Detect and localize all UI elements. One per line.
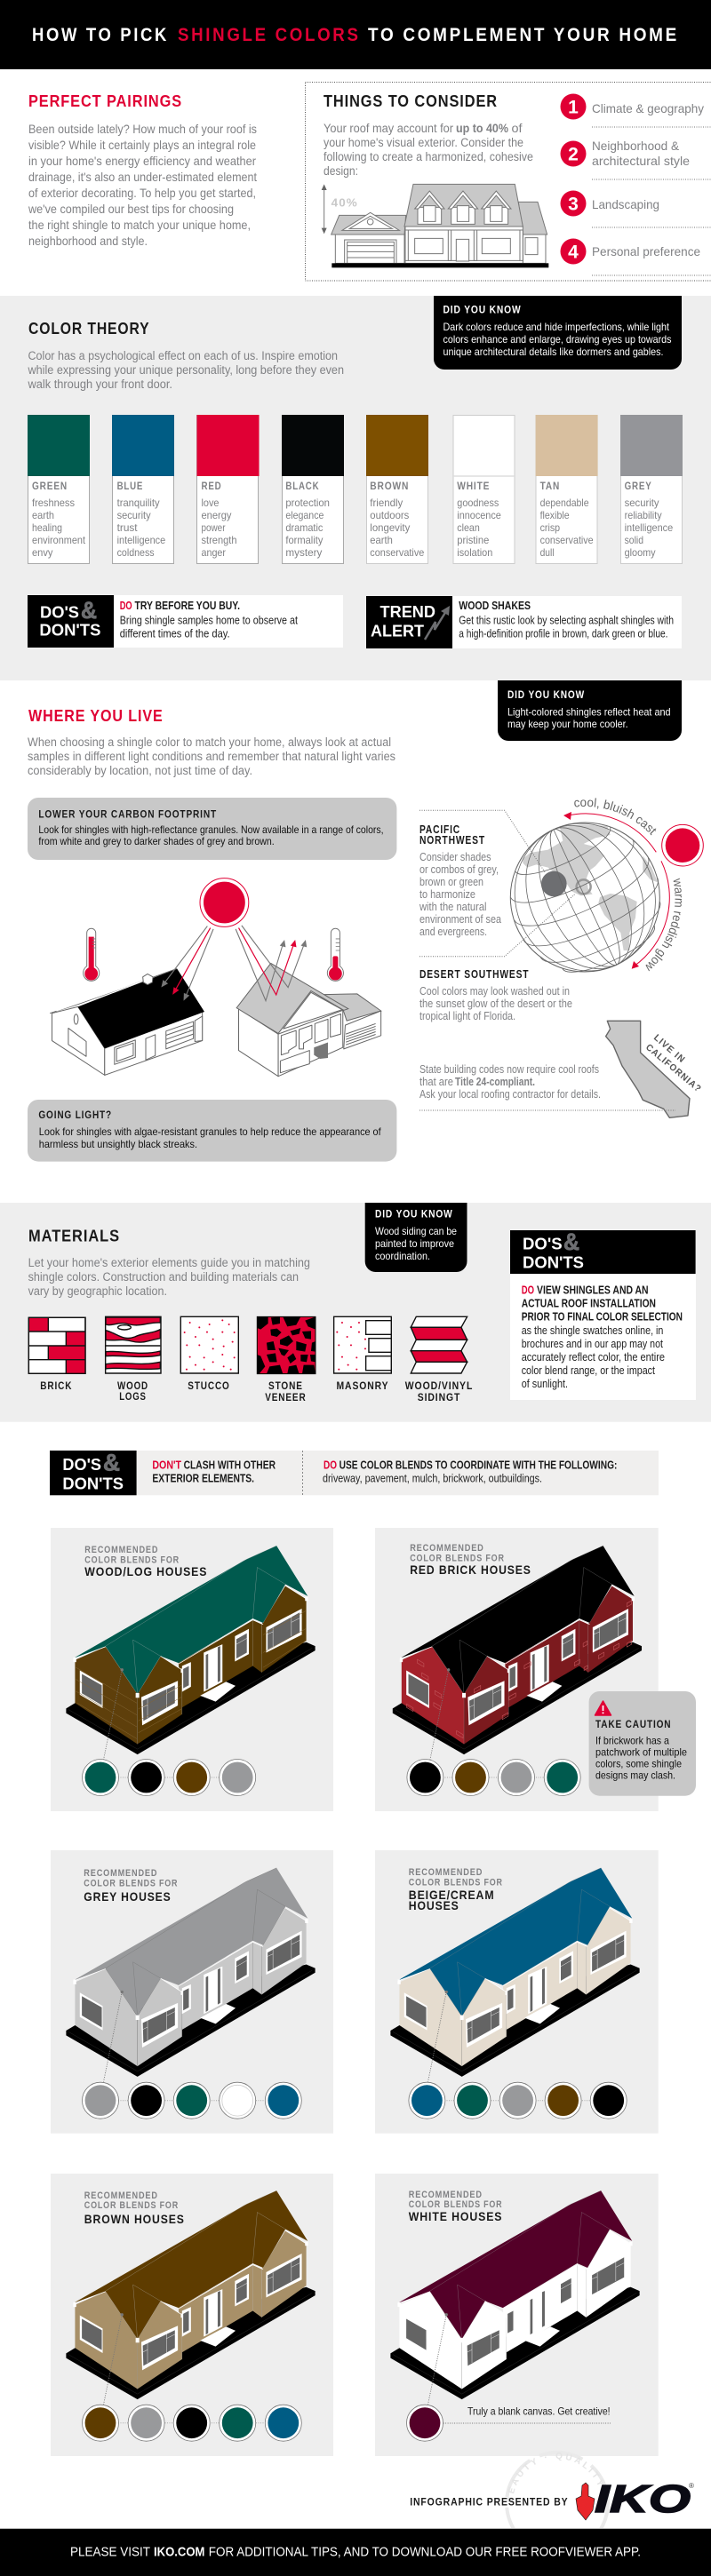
panel: do's and don'ts view shingles: as the shingle swatches online, in <box>522 1324 663 1337</box>
icon: house with 40 percent roof <box>322 184 548 267</box>
swatch card: black: mystery <box>285 546 322 559</box>
list: consideration 3 landscaping: 3 <box>568 194 579 215</box>
text: desert southwest: the sunset glow of the desert or the <box>419 998 572 1010</box>
callout: did you know wood siding: coordination. <box>375 1250 430 1262</box>
list: consideration 1 climate <box>560 94 704 119</box>
panel: perfect pairings: in your home's energy efficiency and weather <box>28 154 256 168</box>
swatch card: green: healing <box>32 521 62 534</box>
swatch card: white: WHITE <box>457 480 490 492</box>
house illustration: maroon roof on white walls <box>390 2190 640 2405</box>
map: california <box>419 1021 704 1117</box>
panel: beige cream houses <box>375 1850 659 2134</box>
callout: did you know wood siding: Wood siding can be <box>375 1225 457 1237</box>
icon: cool thermometer <box>327 928 343 981</box>
text: pacific northwest: NORTHWEST <box>419 834 485 847</box>
icon: masonry: MASONRY <box>336 1381 389 1392</box>
panel: trend alert wood shakes: ALERT <box>371 623 424 640</box>
watermark: stamp: BEAUTY · QUALITY · <box>507 2454 603 2503</box>
heading: beige cream houses: COLOR BLENDS FOR <box>409 1877 503 1888</box>
diagram: globe with light effects <box>419 798 704 973</box>
panel: materials intro: Let your home's exterior elements guide you in matching <box>28 1256 310 1269</box>
panel: where you live intro <box>28 707 395 777</box>
callout: did you know dark colors <box>434 296 682 370</box>
icon: house with 40 percent roof: 40% <box>332 195 358 209</box>
icon: red shield <box>576 2483 595 2520</box>
swatch card: brown: longevity <box>370 521 410 534</box>
callout: lower your carbon footprint: from white and grey to darker shades of grey and brown. <box>38 835 275 847</box>
text: california title 24: Ask your local roofing contractor for details. <box>419 1088 601 1101</box>
panel: trend alert wood shakes <box>366 596 682 648</box>
list: consideration 2 neighborhood: architectural style <box>592 154 690 168</box>
panel: color theory intro: COLOR THEORY <box>28 320 149 338</box>
panel: perfect pairings: we've compiled our best tips for choosing <box>28 202 234 216</box>
panel: do's and don'ts view shingles: DO'S <box>523 1236 563 1253</box>
text: california title 24: that are <box>419 1076 453 1088</box>
text: roof percentage: of <box>512 122 523 135</box>
panel: trend alert wood shakes: TREND <box>380 603 435 621</box>
icon: stone veneer: STONE <box>268 1381 303 1392</box>
text: pacific northwest: PACIFIC <box>419 823 460 836</box>
callout: take caution: If brickwork has a <box>595 1734 669 1746</box>
callout: take caution: patchwork of multiple <box>595 1745 687 1758</box>
callout: did you know light shingles: Light-colored shingles reflect heat and <box>507 705 671 718</box>
swatch card: tan: conservative <box>540 534 594 546</box>
panel: where you live intro: samples in different light conditions and remember that natural light varies <box>28 750 395 763</box>
heading: red brick houses: RED BRICK HOUSES <box>410 1562 531 1577</box>
swatch card: tan: TAN <box>540 480 560 492</box>
header banner: TO COMPLEMENT YOUR HOME <box>368 25 679 45</box>
panel: color theory intro: while expressing your unique personality, long before they even <box>28 363 344 377</box>
callout: lower your carbon footprint: Look for shingles with high-reflectance granules. Now available in a range of colors, <box>38 823 384 836</box>
swatch card: green: freshness <box>32 497 75 509</box>
swatch card: red: power <box>201 521 226 534</box>
heading: brown houses: RECOMMENDED <box>84 2190 158 2201</box>
panel: things to consider <box>306 82 711 281</box>
text: roof percentage: design: <box>324 164 358 178</box>
panel: perfect pairings: Been outside lately? How much of your roof is <box>28 122 257 136</box>
swatch card: green: environment <box>32 534 86 546</box>
swatch card: tan: dependable <box>540 497 589 509</box>
panel: brown houses <box>51 2174 333 2456</box>
swatch card: white: isolation <box>457 546 492 559</box>
icon: stucco: STUCCO <box>188 1381 230 1392</box>
callout: did you know light shingles: may keep your home cooler. <box>507 718 628 730</box>
palette: brown houses <box>82 2405 301 2441</box>
panel: do's and don'ts try before you buy <box>28 595 343 648</box>
list: consideration 2 neighborhood: Neighborhood & <box>592 139 680 153</box>
text: pacific northwest <box>419 823 501 938</box>
heading: wood log houses: WOOD/LOG HOUSES <box>84 1564 207 1578</box>
palette: grey houses <box>82 2082 301 2119</box>
swatch card: tan: flexible <box>540 509 570 521</box>
swatch card: blue: coldness <box>117 546 155 559</box>
list: consideration 2 neighborhood <box>560 139 690 168</box>
panel: do's and don'ts color blends bar: DON'T <box>152 1459 181 1472</box>
panel: do's and don'ts color blends bar: DO'S <box>62 1456 101 1474</box>
swatch card: blue: trust <box>117 521 138 534</box>
heading: grey houses: GREY HOUSES <box>84 1889 172 1904</box>
text: desert southwest: DESERT SOUTHWEST <box>419 968 529 981</box>
panel: materials intro: shingle colors. Construction and building materials can <box>28 1270 299 1284</box>
swatch card: grey <box>620 415 683 563</box>
swatch card: tan: dull <box>540 546 555 559</box>
house illustration: brown roof on tan walls <box>66 2190 316 2405</box>
map: california: LIVE IN <box>651 1032 687 1065</box>
swatch card: blue: intelligence <box>117 534 165 546</box>
callout: going light: harmless but unsightly black streaks. <box>39 1138 197 1150</box>
panel: where you live intro: When choosing a shingle color to match your home, always look at actual <box>28 735 391 749</box>
swatch card: grey: solid <box>625 534 643 546</box>
callout: did you know light shingles: DID YOU KNOW <box>507 688 585 701</box>
heading: white houses: COLOR BLENDS FOR <box>409 2199 502 2210</box>
swatch card: white: pristine <box>457 534 490 546</box>
panel: do's and don'ts view shingles: accurately reflect color, the entire <box>522 1351 665 1364</box>
diagram: sun heat on dark and light roofs <box>50 879 381 1077</box>
footer banner <box>0 2528 711 2576</box>
panel: color theory intro: walk through your front door. <box>28 378 172 391</box>
swatch card: black: protection <box>285 497 330 509</box>
text: california title 24 <box>419 1063 601 1101</box>
swatch card: black: BLACK <box>285 480 319 492</box>
heading: red brick houses: RECOMMENDED <box>410 1543 484 1554</box>
swatch card: green <box>28 415 90 563</box>
text: desert southwest: tropical light of Florida. <box>419 1010 515 1022</box>
swatch card: red: RED <box>201 480 222 492</box>
panel: red brick houses <box>375 1528 659 1811</box>
text: pacific northwest: brown or green <box>419 876 483 888</box>
icon: wood logs: LOGS <box>119 1392 147 1403</box>
heading: things to consider: THINGS TO CONSIDER <box>324 92 498 110</box>
swatch card: white <box>453 416 515 563</box>
icon: brick <box>28 1317 85 1392</box>
text: california title 24: State building codes now require cool roofs <box>419 1063 599 1076</box>
panel: do's and don'ts view shingles: ACTUAL ROOF INSTALLATION <box>522 1298 656 1310</box>
panel: materials intro <box>28 1228 310 1298</box>
swatch card: green: envy <box>32 546 53 559</box>
swatch card: black: elegance <box>285 509 324 521</box>
list: consideration 1 climate: 1 <box>568 98 579 117</box>
panel: perfect pairings: visible? While it certainly plays an integral role <box>28 138 256 152</box>
text: pacific northwest: environment of sea <box>419 913 501 926</box>
swatch card: green: earth <box>32 509 54 521</box>
swatch card: red: strength <box>201 534 236 546</box>
heading: beige cream houses: RECOMMENDED <box>409 1867 483 1878</box>
panel: perfect pairings <box>28 92 257 248</box>
arrow: warm reddish glow arc <box>631 861 682 972</box>
swatch card: brown: BROWN <box>370 480 409 492</box>
panel: do's and don'ts view shingles: & <box>563 1228 579 1255</box>
panel: do's and don'ts color blends bar: EXTERIOR ELEMENTS. <box>152 1473 254 1485</box>
swatch card: red: love <box>201 497 220 509</box>
panel: do's and don'ts color blends bar: DON'TS <box>62 1475 124 1493</box>
list: consideration 1 climate: Climate & geography <box>592 101 704 115</box>
icon: stucco <box>180 1316 238 1392</box>
panel: materials intro: vary by geographic location. <box>28 1284 167 1298</box>
text: roof percentage <box>324 122 533 178</box>
heading: red brick houses: COLOR BLENDS FOR <box>410 1553 505 1563</box>
panel: do's and don'ts try before you buy: different times of the day. <box>120 628 230 640</box>
swatch card: grey: gloomy <box>625 546 656 559</box>
callout: did you know dark colors: unique architectural details like dormers and gables. <box>443 346 663 358</box>
arrows: sun rays absorbed and reflected <box>161 926 307 1001</box>
icon: rising zigzag arrow <box>425 606 450 640</box>
heading: wood log houses <box>84 1545 207 1578</box>
panel: do's and don'ts color blends bar: USE COLOR BLENDS TO COORDINATE WITH THE FOLLOWING: <box>340 1459 617 1472</box>
panel: do's and don'ts color blends bar: driveway, pavement, mulch, brickwork, outbuildings. <box>323 1473 542 1485</box>
icon: sun <box>200 879 249 926</box>
house illustration: green roof on brown wood <box>66 1546 316 1760</box>
callout: did you know wood siding: painted to improve <box>375 1237 454 1250</box>
swatch card: blue: security <box>117 509 151 521</box>
callout: going light: Look for shingles with algae-resistant granules to help reduce the appearance of <box>39 1125 381 1138</box>
icon: wood logs: WOOD <box>117 1381 148 1392</box>
palette: white houses: Truly a blank canvas. Get creative! <box>467 2405 611 2418</box>
swatch card: blue: BLUE <box>117 480 143 492</box>
heading: brown houses <box>84 2190 185 2226</box>
palette: wood log houses <box>82 1759 256 1796</box>
icon: wood vinyl siding: WOOD/VINYL <box>405 1381 473 1392</box>
list: consideration 4 personal preference: 4 <box>568 242 579 263</box>
callout: did you know wood siding <box>365 1203 467 1272</box>
icon: sun beside globe <box>662 824 703 866</box>
swatch card: brown: outdoors <box>370 509 409 521</box>
callout: did you know dark colors: DID YOU KNOW <box>443 304 521 316</box>
swatch card: tan <box>536 415 598 563</box>
swatch card: white: innocence <box>457 509 501 521</box>
panel: do's and don'ts try before you buy: TRY BEFORE YOU BUY. <box>135 600 240 612</box>
house illustration: grey roof on grey walls <box>66 1868 316 2082</box>
list: consideration 3 landscaping: Landscaping <box>592 197 659 211</box>
callout: did you know dark colors: colors enhance and enlarge, drawing eyes up towards <box>443 333 672 346</box>
text: pacific northwest: and evergreens. <box>419 926 487 938</box>
list: consideration 4 personal preference: Personal preference <box>592 244 700 258</box>
text: pacific northwest: with the natural <box>419 901 487 913</box>
heading: white houses: RECOMMENDED <box>409 2190 483 2200</box>
heading: grey houses: COLOR BLENDS FOR <box>84 1878 178 1888</box>
heading: grey houses <box>84 1868 178 1904</box>
swatch card: grey: reliability <box>625 509 662 521</box>
panel: do's and don'ts view shingles: of sunlight. <box>522 1378 568 1390</box>
panel: trend alert wood shakes: WOOD SHAKES <box>459 600 531 612</box>
heading: brown houses: BROWN HOUSES <box>84 2212 185 2226</box>
swatch card: blue <box>112 415 174 563</box>
callout: did you know wood siding: DID YOU KNOW <box>375 1208 453 1220</box>
logo: presented by IKO: INFOGRAPHIC PRESENTED BY <box>410 2496 569 2508</box>
swatch card: red <box>197 415 260 563</box>
swatch card: grey: GREY <box>625 480 652 492</box>
list: consideration 2 neighborhood: 2 <box>568 144 579 165</box>
panel: do's and don'ts color blends bar <box>50 1450 659 1495</box>
icon: hot thermometer <box>84 928 100 981</box>
panel: perfect pairings: of exterior decorating. To help you get started, <box>28 186 256 200</box>
icon: wood vinyl siding: SIDINGT <box>418 1393 460 1403</box>
icon: stone veneer: VENEER <box>265 1393 307 1403</box>
text: pacific northwest: to harmonize <box>419 888 475 901</box>
swatch card: brown <box>366 415 428 563</box>
panel: trend alert wood shakes: a high-definition profile in brown, dark green or blue. <box>459 628 668 640</box>
panel: do's and don'ts view shingles: DON'TS <box>523 1254 584 1272</box>
panel: do's and don'ts try before you buy: DO'S <box>40 604 79 622</box>
panel: do's and don'ts try before you buy: DON'TS <box>39 622 100 640</box>
panel: perfect pairings: PERFECT PAIRINGS <box>28 92 182 110</box>
globe <box>487 799 683 996</box>
swatch card: white: goodness <box>457 497 499 509</box>
swatch card: blue: tranquility <box>117 497 160 509</box>
map: california: CALIFORNIA? <box>643 1042 704 1094</box>
icon: stone veneer <box>257 1316 316 1403</box>
logo: presented by IKO: ® <box>689 2482 694 2490</box>
panel: trend alert wood shakes: Get this rustic look by selecting asphalt shingles with <box>459 615 674 627</box>
panel: do's and don'ts view shingles: DO <box>522 1284 534 1297</box>
arrow: cool bluish cast arc: cool, bluish cast <box>574 798 656 835</box>
panel: do's and don'ts color blends bar: DO <box>324 1459 337 1472</box>
panel: do's and don'ts color blends bar: & <box>103 1450 120 1476</box>
callout: going light: GOING LIGHT? <box>38 1109 112 1121</box>
swatch card: green: GREEN <box>32 480 68 492</box>
heading: wood log houses: COLOR BLENDS FOR <box>84 1554 180 1565</box>
swatch card: black <box>282 415 344 563</box>
text: roof percentage: your home's visual exterior. Consider the <box>324 136 523 149</box>
panel: do's and don'ts try before you buy: DO <box>120 600 132 612</box>
panel: do's and don'ts view shingles: VIEW SHINGLES AND AN <box>537 1284 649 1297</box>
panel: color theory intro <box>28 320 344 391</box>
panel: perfect pairings: the right shingle to match your unique home, <box>28 218 251 232</box>
panel: where you live intro: considerably by location, not just time of day. <box>28 764 252 777</box>
footer banner: PLEASE VISIT <box>70 2544 150 2559</box>
panel: where you live intro: WHERE YOU LIVE <box>28 707 164 725</box>
swatch card: white: clean <box>457 521 480 534</box>
callout: did you know dark colors: Dark colors reduce and hide imperfections, while light <box>443 321 670 333</box>
panel: do's and don'ts color blends bar: CLASH WITH OTHER <box>184 1459 276 1472</box>
house illustration: blue roof on beige walls <box>390 1868 640 2082</box>
palette: red brick houses <box>407 1759 580 1796</box>
header banner <box>0 0 711 69</box>
arrow: cool bluish cast arc <box>563 798 657 853</box>
swatch card: grey: security <box>625 497 659 509</box>
panel: color theory intro: Color has a psychological effect on each of us. Inspire emotion <box>28 349 338 362</box>
icon: brick: BRICK <box>40 1381 72 1392</box>
heading: brown houses: COLOR BLENDS FOR <box>84 2200 179 2211</box>
swatch card: grey: intelligence <box>625 521 673 534</box>
callout: take caution: colors, some shingle <box>595 1757 682 1769</box>
house illustration: black roof on red brick <box>393 1546 642 1760</box>
callout: did you know light shingles <box>498 680 682 741</box>
panel: grey houses <box>51 1850 333 2134</box>
header banner: SHINGLE COLORS <box>178 25 361 45</box>
callout: take caution: TAKE CAUTION <box>595 1718 671 1730</box>
icon: warning triangle <box>595 1701 611 1715</box>
logo: presented by IKO <box>410 2477 694 2521</box>
text: desert southwest: Cool colors may look washed out in <box>419 985 570 998</box>
panel: perfect pairings: neighborhood and style. <box>28 234 148 248</box>
text: roof percentage: following to create a harmonized, cohesive <box>324 150 533 163</box>
text: roof percentage: Your roof may account for <box>324 122 453 135</box>
footer banner: FOR ADDITIONAL TIPS, AND TO DOWNLOAD OUR FREE ROOFVIEWER APP. <box>209 2544 641 2559</box>
heading: grey houses: RECOMMENDED <box>84 1868 157 1879</box>
panel: do's and don'ts view shingles: color blend range, or the impact <box>522 1364 655 1377</box>
list: consideration 4 personal preference <box>560 238 700 265</box>
heading: wood log houses: RECOMMENDED <box>84 1545 158 1555</box>
callout: going light <box>28 1100 396 1162</box>
panel: white houses <box>375 2174 659 2456</box>
palette: beige cream houses <box>409 2082 627 2119</box>
heading: white houses: WHITE HOUSES <box>409 2209 502 2223</box>
list: consideration 3 landscaping <box>560 190 659 217</box>
swatch card: tan: crisp <box>540 521 560 534</box>
swatch card: brown: friendly <box>370 497 403 509</box>
panel: do's and don'ts view shingles: brochures and in our app may not <box>522 1338 663 1350</box>
heading: white houses <box>409 2190 502 2223</box>
heading: red brick houses <box>410 1543 531 1577</box>
text: pacific northwest: or combos of grey, <box>419 863 499 876</box>
watermark: stamp <box>505 2453 610 2528</box>
heading: beige cream houses <box>409 1867 503 1912</box>
panel: wood log houses <box>51 1528 333 1811</box>
swatch card: brown: earth <box>370 534 393 546</box>
text: roof percentage: up to 40% <box>456 122 508 135</box>
swatch card: black: dramatic <box>285 521 323 534</box>
panel: do's and don'ts try before you buy: & <box>81 597 97 624</box>
callout: lower your carbon footprint <box>28 798 396 860</box>
swatch card: red: energy <box>201 509 231 521</box>
palette: white houses <box>407 2405 611 2441</box>
callout: take caution <box>589 1691 696 1796</box>
heading: beige cream houses: HOUSES <box>409 1898 459 1912</box>
text: pacific northwest: Consider shades <box>419 851 491 863</box>
text: california title 24: Title 24-compliant. <box>455 1076 535 1088</box>
heading: beige cream houses: BEIGE/CREAM <box>409 1888 494 1902</box>
panel: do's and don'ts try before you buy: Bring shingle samples home to observe at <box>120 615 298 627</box>
arrow: warm reddish glow arc: warm reddish glow <box>645 878 682 972</box>
icon: wood vinyl siding <box>405 1316 473 1403</box>
callout: lower your carbon footprint: LOWER YOUR CARBON FOOTPRINT <box>38 807 217 820</box>
panel: perfect pairings: drainage, it's also an under-estimated element <box>28 170 257 184</box>
icon: wood logs <box>106 1316 161 1403</box>
panel: do's and don'ts view shingles <box>510 1228 696 1400</box>
house with black roof <box>50 968 204 1075</box>
header banner: HOW TO PICK <box>32 25 169 45</box>
callout: take caution: designs may clash. <box>595 1769 675 1781</box>
text: desert southwest <box>419 968 572 1022</box>
swatch card: brown: conservative <box>370 546 425 559</box>
logo: presented by IKO: IKO <box>595 2477 691 2521</box>
house with light roof <box>236 963 381 1077</box>
swatch card: black: formality <box>285 534 323 546</box>
swatch card: red: anger <box>201 546 226 559</box>
icon: masonry <box>334 1316 391 1392</box>
footer banner: IKO.COM <box>154 2544 204 2559</box>
panel: materials intro: MATERIALS <box>28 1228 120 1245</box>
